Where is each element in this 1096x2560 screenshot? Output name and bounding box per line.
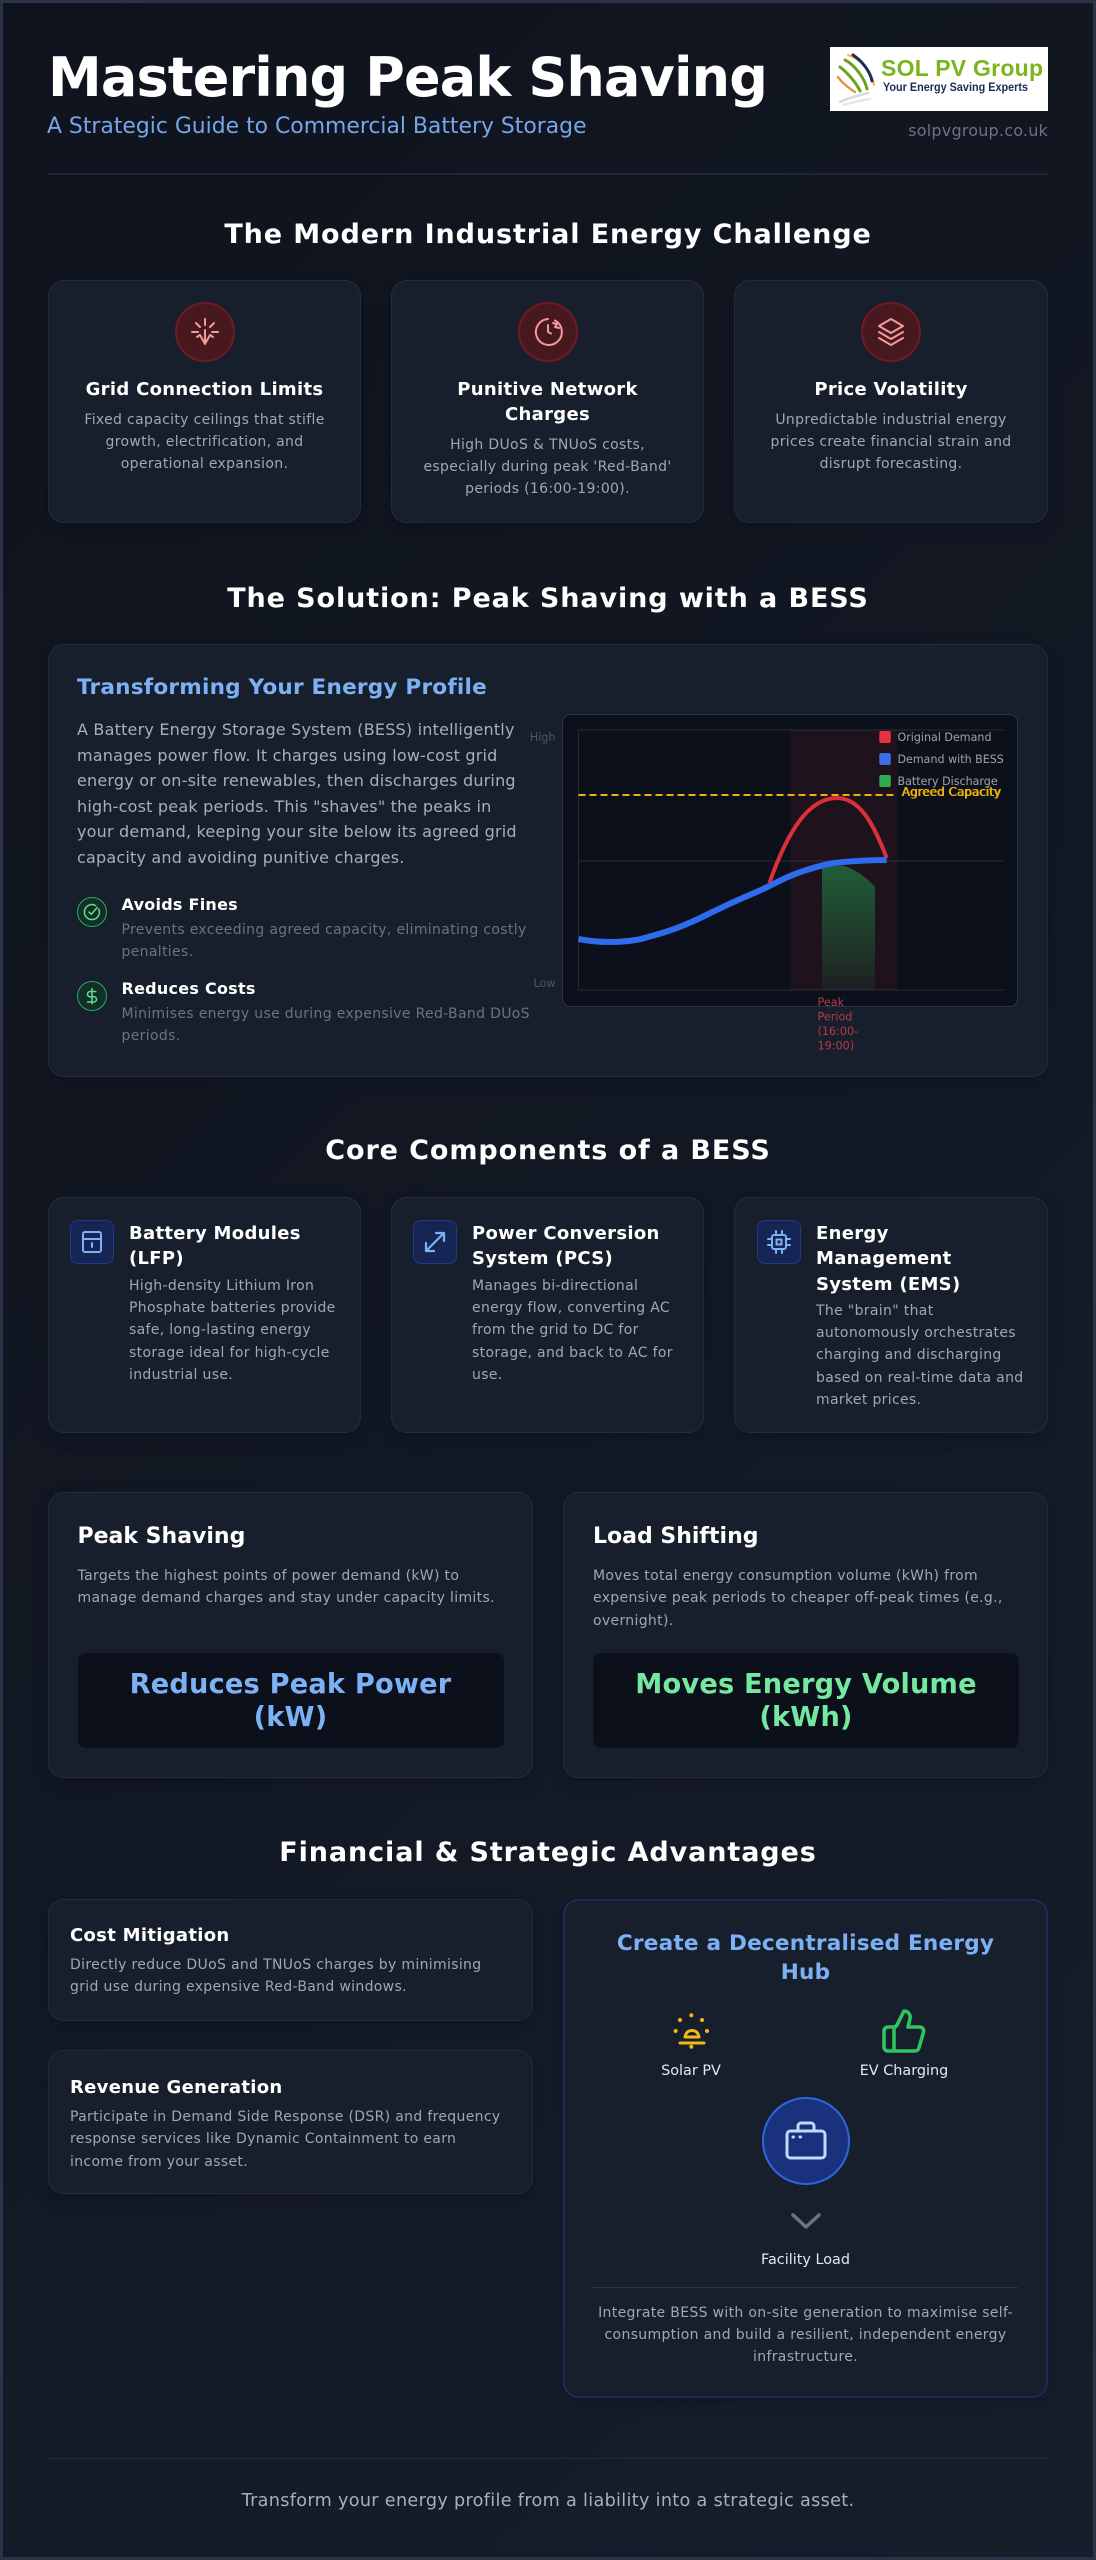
demand with BESS curve: [578, 860, 887, 942]
card text: High DUoS & TNUoS costs,: [450, 436, 645, 452]
panel: cost mitigation: [48, 1899, 533, 2021]
heading: challenge: The Modern Industrial Energy Challenge: [224, 218, 872, 250]
panel text: [593, 1568, 1003, 1629]
explanation text: energy or on-site renewables, then discharges during: [77, 771, 516, 790]
metric callout: Reduces Peak Power: [130, 1668, 451, 1700]
panel: load shifting: [563, 1492, 1048, 1778]
icon: check: [77, 897, 107, 927]
component text: safe, long-lasting energy: [129, 1322, 311, 1338]
card title: Cost Mitigation: [70, 1924, 230, 1946]
benefit text: Minimises energy use during expensive Red-Band DUoS: [122, 1006, 530, 1022]
icon: chevron down: [791, 2213, 821, 2229]
component text: autonomously orchestrates: [816, 1325, 1016, 1341]
card title: Revenue Generation: [70, 2076, 282, 2098]
explanation text: high-cost peak periods. This "shaves" the peaks in: [77, 797, 492, 816]
panel: battery modules: [48, 1197, 361, 1433]
panel text: [77, 1568, 495, 1606]
original demand curve: [769, 798, 887, 883]
component title: [472, 1222, 660, 1269]
panel text: manage demand charges and stay under capacity limits.: [78, 1590, 495, 1606]
peak period label: (16:00-: [818, 1025, 858, 1038]
panel: grid connection limits: [48, 280, 361, 523]
legend: Battery Discharge: [898, 775, 998, 788]
peak period label: Period: [818, 1010, 852, 1024]
explanation text: your demand, keeping your site below its agreed grid: [77, 822, 517, 841]
heading: components: Core Components of a BESS: [325, 1135, 771, 1166]
icon: grid limit burst: [174, 302, 234, 362]
component title: Battery Modules: [129, 1222, 301, 1244]
metric callout: (kW): [254, 1702, 327, 1732]
logo: SOL PV Group: Your Energy Saving Experts: [883, 82, 1028, 94]
component text: storage, and back to AC for: [472, 1345, 673, 1361]
card text: [423, 436, 672, 497]
chart: demand profile with and without BESS: [530, 714, 1018, 1052]
panel: peak shaving: [48, 1492, 533, 1778]
card title: Price Volatility: [814, 378, 968, 400]
benefit title: avoids fines: Avoids Fines: [122, 895, 238, 914]
card text: [770, 412, 1012, 472]
peak period label: [818, 996, 858, 1052]
panel: price volatility: [734, 280, 1048, 523]
hub text: consumption and build a resilient, independent energy: [605, 2327, 1006, 2343]
legend: Original Demand: [898, 731, 991, 744]
card text: [84, 412, 325, 472]
logo: SOL PV Group: [830, 47, 1048, 111]
icon: clock: [518, 302, 578, 362]
agreed capacity label: Agreed Capacity: [902, 785, 1001, 799]
component text: Manages bi-directional: [472, 1278, 638, 1294]
card text: growth, electrification, and: [106, 434, 303, 450]
icon: solar: [674, 2013, 709, 2049]
card text: [70, 1957, 481, 1995]
heading: advantages: Financial & Strategic Advantages: [279, 1837, 817, 1868]
label: ev charging: EV Charging: [860, 2063, 948, 2079]
icon: dollar: [77, 981, 107, 1011]
website: solpvgroup.co.uk: [908, 121, 1048, 140]
agreed capacity line: [578, 794, 897, 796]
card text: income from your asset.: [70, 2154, 248, 2170]
axis label: high: High: [530, 731, 556, 744]
component text: [129, 1278, 336, 1383]
axis label: low: Low: [533, 977, 556, 990]
metric callout: [78, 1653, 504, 1748]
hub heading: [617, 1931, 994, 1985]
component title: [129, 1222, 301, 1269]
card text: Fixed capacity ceilings that stifle: [84, 412, 325, 428]
component text: use.: [472, 1367, 503, 1383]
subtitle: A Strategic Guide to Commercial Battery Storage: [47, 114, 587, 139]
card text: Participate in Demand Side Response (DSR) and frequency: [70, 2109, 501, 2125]
component text: High-density Lithium Iron: [129, 1278, 314, 1294]
logo: SOL PV Group: SOL PV Group: [881, 55, 1043, 81]
explanation text: capacity and avoiding punitive charges.: [77, 848, 405, 867]
panel text: Moves total energy consumption volume (kWh) from: [593, 1568, 978, 1584]
panel text: overnight).: [593, 1613, 674, 1629]
benefit title: reduces costs: Reduces Costs: [122, 979, 256, 998]
card text: [70, 2109, 501, 2170]
card title: [457, 378, 638, 425]
label: solar pv: Solar PV: [661, 2063, 721, 2079]
component text: storage ideal for high-cycle: [129, 1345, 330, 1361]
panel text: expensive peak periods to cheaper off-peak times (e.g.,: [593, 1590, 1003, 1606]
card title: Charges: [505, 404, 590, 425]
peak period band: [790, 730, 897, 990]
icon: bidirectional arrow: [413, 1220, 457, 1264]
component text: [472, 1278, 673, 1383]
icon: thumbs up: [882, 2009, 926, 2053]
panel: punitive network charges: [391, 280, 704, 523]
component text: based on real-time data and: [816, 1370, 1024, 1386]
card text: response services like Dynamic Containment to earn: [70, 2131, 456, 2147]
hub heading: Hub: [781, 1960, 830, 1985]
footer tagline: Transform your energy profile from a liability into a strategic asset.: [242, 2491, 854, 2511]
explanation text: A Battery Energy Storage System (BESS) intelligently: [77, 720, 515, 739]
icon: hub circle with briefcase: [762, 2097, 850, 2185]
panel: energy management system: [734, 1197, 1048, 1433]
card text: prices create financial strain and: [770, 434, 1012, 450]
component text: charging and discharging: [816, 1347, 1002, 1363]
card text: especially during peak 'Red-Band': [423, 459, 672, 475]
component text: [816, 1302, 1024, 1408]
hub text: infrastructure.: [753, 2349, 858, 2365]
component text: energy flow, converting AC: [472, 1300, 670, 1316]
benefit text: [122, 922, 527, 960]
benefit text: [122, 1006, 530, 1044]
hub text: Integrate BESS with on-site generation to maximise self-: [598, 2304, 1013, 2320]
metric callout: (kWh): [759, 1702, 853, 1732]
component text: market prices.: [816, 1392, 921, 1408]
explanation text: [77, 720, 517, 867]
heading: solution: The Solution: Peak Shaving with a BESS: [227, 582, 869, 614]
card text: Directly reduce DUoS and TNUoS charges by minimising: [70, 1957, 481, 1973]
agreed capacity label: Agreed Capacity: [902, 785, 1001, 799]
component text: Phosphate batteries provide: [129, 1300, 336, 1316]
peak period label: 19:00): [818, 1040, 854, 1052]
component title: Energy: [816, 1222, 889, 1244]
component title: (LFP): [129, 1248, 184, 1269]
card text: operational expansion.: [121, 456, 288, 472]
metric callout: Moves Energy Volume: [635, 1668, 977, 1700]
hub heading: Create a Decentralised Energy: [617, 1931, 994, 1956]
panel: power conversion system: [391, 1197, 704, 1433]
component text: from the grid to DC for: [472, 1322, 639, 1338]
panel text: Targets the highest points of power demand (kW) to: [78, 1568, 459, 1584]
card text: grid use during expensive Red-Band windows.: [70, 1979, 407, 1995]
title: Mastering Peak Shaving: [48, 46, 767, 109]
card text: Unpredictable industrial energy: [775, 412, 1007, 428]
panel heading: Transforming Your Energy Profile: [77, 675, 487, 700]
legend: [879, 731, 1004, 788]
benefit text: penalties.: [122, 944, 193, 960]
benefit text: Prevents exceeding agreed capacity, eliminating costly: [122, 922, 527, 938]
peak period label: Peak: [818, 996, 845, 1009]
component title: Management: [816, 1248, 952, 1269]
component text: industrial use.: [129, 1367, 233, 1383]
panel: decentralised energy hub: [563, 1899, 1048, 2398]
icon: layers: [861, 302, 921, 362]
battery discharge area: [822, 866, 875, 990]
hub text: [598, 2304, 1013, 2365]
explanation text: manages power flow. It charges using low-cost grid: [77, 746, 498, 765]
icon: battery module: [70, 1220, 114, 1264]
component text: The "brain" that: [816, 1302, 934, 1318]
component title: [816, 1222, 960, 1295]
legend: Demand with BESS: [898, 753, 1004, 766]
benefit text: periods.: [122, 1028, 180, 1044]
component title: System (PCS): [472, 1248, 613, 1269]
panel title: Peak Shaving: [78, 1524, 245, 1548]
card text: disrupt forecasting.: [820, 456, 962, 472]
panel title: Load Shifting: [593, 1524, 758, 1548]
card title: Punitive Network: [457, 378, 638, 400]
metric callout: [593, 1653, 1019, 1748]
component title: Power Conversion: [472, 1222, 660, 1244]
card title: Grid Connection Limits: [86, 378, 323, 400]
panel: revenue generation: [48, 2050, 533, 2194]
component title: System (EMS): [816, 1274, 960, 1295]
icon: chip: [757, 1220, 801, 1264]
panel: transforming energy profile: [48, 644, 1048, 1077]
label: facility load: Facility Load: [761, 2252, 850, 2268]
card text: periods (16:00-19:00).: [465, 481, 630, 497]
